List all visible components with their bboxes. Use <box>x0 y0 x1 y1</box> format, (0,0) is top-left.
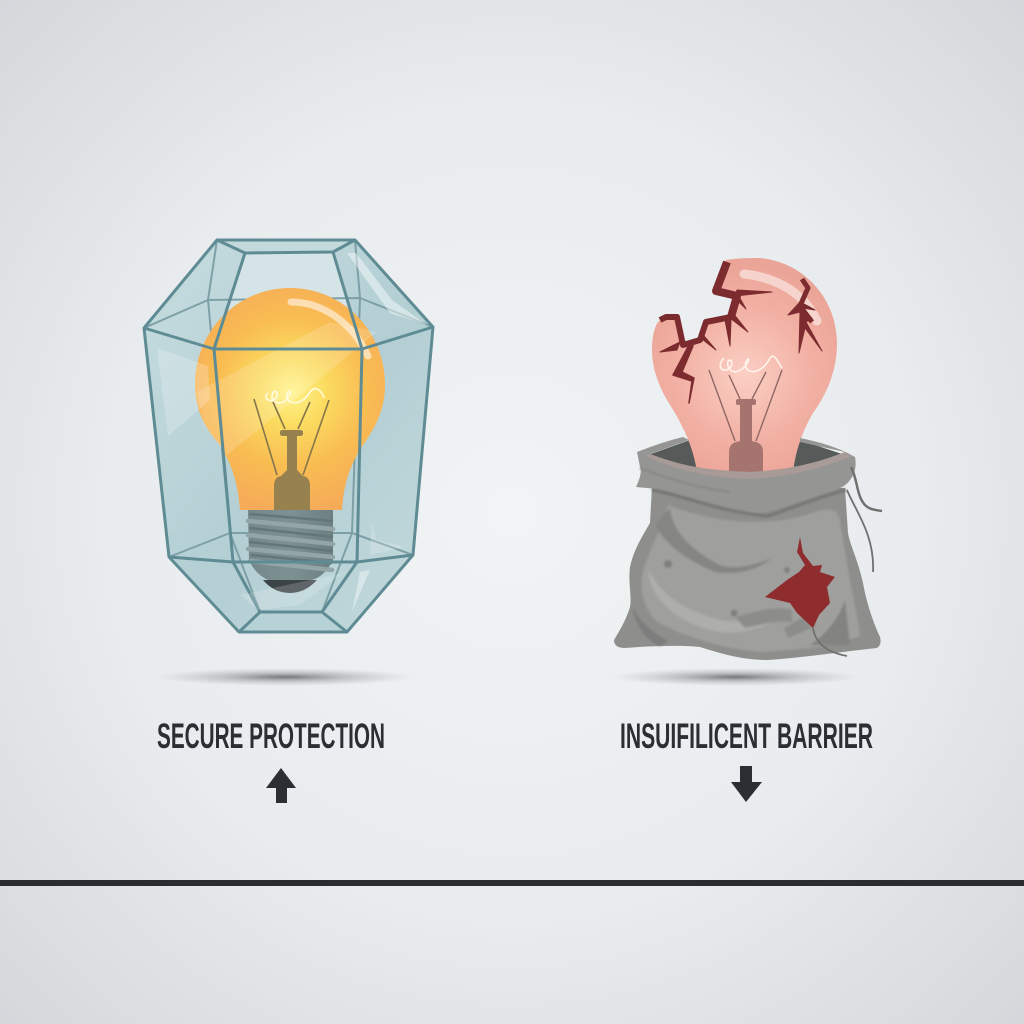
glass reflections <box>157 253 427 612</box>
filament coil <box>720 356 782 372</box>
stem and wires <box>709 370 782 475</box>
baseline rule <box>0 880 1024 886</box>
filament coil <box>266 389 324 403</box>
glass body behind bulb <box>144 240 433 632</box>
diagonal reflection across bulb <box>197 322 377 455</box>
label: secure protection: SECURE PROTECTION <box>157 717 385 756</box>
bulb glass <box>195 288 385 510</box>
arrow: down <box>731 766 762 802</box>
sack body <box>614 487 881 660</box>
glass front edges <box>144 240 433 632</box>
broken bulb <box>652 258 837 472</box>
sack folds <box>632 505 860 652</box>
icon: light bulb in glass case <box>144 240 433 632</box>
sack opening <box>648 440 845 472</box>
loose threads <box>813 467 882 656</box>
filament stem <box>254 399 329 510</box>
sack collar <box>636 437 856 516</box>
cracks <box>660 262 822 403</box>
tear <box>765 537 835 628</box>
screw base <box>248 510 333 593</box>
icon: cracked bulb in torn sack <box>614 258 882 660</box>
shadow: left <box>155 668 415 686</box>
shadow: right <box>610 668 860 686</box>
bulb highlight <box>744 274 817 321</box>
arrow: up <box>266 768 296 803</box>
bulb highlight <box>291 302 368 356</box>
